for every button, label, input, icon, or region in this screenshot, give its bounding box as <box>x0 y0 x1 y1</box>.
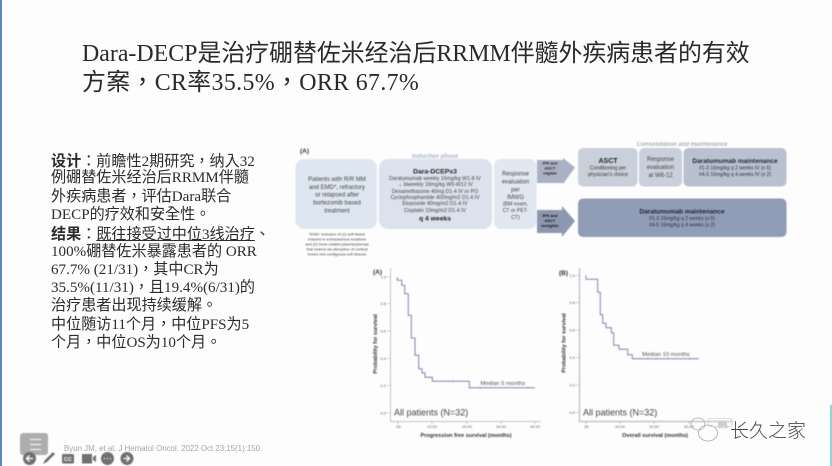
chart A: progression free survival: 20.00 <box>462 424 473 429</box>
footnote: masses in extraosseous locations <box>308 236 366 242</box>
box: ASCT: ASCT <box>598 158 618 165</box>
chart A: progression free survival: Progression free survival (months) <box>420 433 512 439</box>
chart A: progression free survival: (A) <box>373 269 382 276</box>
arrow: ASCT eligible: eligible <box>543 170 558 176</box>
box: patients: and EMD*, refractory <box>309 185 365 191</box>
chart A: progression free survival: 30.00 <box>496 424 507 429</box>
text block: design and results: 个月，中位OS为10个月。 <box>51 335 221 351</box>
footnote: and (2) bone-related plasmacytomas <box>305 242 369 246</box>
arrow: ASCT ineligible: ASCT <box>545 218 556 223</box>
text block: design and results: 例硼替佐米经治后RRMM伴髓 <box>51 170 249 186</box>
citation: Byun JM, et al. J Hematol Oncol. 2022 Oct 23;15(1):150. <box>64 444 262 453</box>
treatment schema <box>296 142 786 256</box>
icon: captions: CC <box>64 457 72 463</box>
chart B: overall survival: 10.00 <box>615 424 626 429</box>
chart A: progression free survival: .00 <box>395 424 402 429</box>
box: response evaluation W6-12: evaluation <box>647 165 674 171</box>
box: response evaluation: evaluation <box>502 180 529 186</box>
chart A: progression free survival: 0.2 <box>380 383 387 388</box>
chart A: progression free survival: 40.00 <box>530 424 541 429</box>
arrow: ASCT ineligible: IPR and <box>543 213 558 218</box>
box: response evaluation W6-12: at W6-12 <box>648 173 673 179</box>
chart B: overall survival: Median 10 months <box>642 352 690 358</box>
chart A: progression free survival: 1.0 <box>380 274 387 280</box>
watermark text: 长久之家 <box>730 416 806 443</box>
arrow: ASCT eligible: ASCT <box>545 166 556 170</box>
box: Dara-DCEP regimen: → biweekly 16mg/kg W9-W12 IV <box>397 182 473 188</box>
box: ASCT <box>578 148 638 186</box>
box: response evaluation W6-12 <box>639 148 682 186</box>
chart B: overall survival: 40.00 <box>718 424 729 429</box>
box: response evaluation <box>494 159 536 229</box>
chart B: overall survival: 0.0 <box>569 410 576 415</box>
chart A: progression free survival: 10.00 <box>427 424 438 429</box>
box: response evaluation W6-12: Response <box>647 157 675 163</box>
box: Dara-DCEP regimen <box>379 159 492 229</box>
box: daratumumab maintenance upper: #4-5 16mg/kg q 4 weeks IV (x 2) <box>699 172 771 178</box>
box: ASCT: Conditioning per <box>590 166 627 172</box>
chart B: overall survival: .00 <box>583 424 590 429</box>
chart B: overall survival: 0.2 <box>569 382 576 388</box>
chart A: progression free survival: Median 5 months <box>480 381 525 387</box>
box: daratumumab maintenance upper: Daratumumab maintenance <box>692 158 778 165</box>
box: patients <box>296 159 377 229</box>
chart A: progression free survival: Probability for survival <box>373 314 379 374</box>
box: daratumumab maintenance upper: #1-3 16mg/kg q 2 weeks IV (x 6) <box>699 166 771 172</box>
text block: design and results: 结果：既往接受过中位3线治疗、 <box>51 222 270 244</box>
text block: design and results: 67.7% (21/31)，其中CR为 <box>51 262 219 278</box>
player controls <box>20 432 134 466</box>
text block: design and results: 中位随访11个月，中位PFS为5 <box>51 317 249 333</box>
text block: design and results <box>51 149 270 351</box>
box: daratumumab maintenance lower: #1-3 16mg/kg q 2 weeks (x 6) <box>649 216 715 222</box>
box: response evaluation: per <box>511 188 520 194</box>
box: patients: Patients with R/R MM <box>308 177 366 183</box>
chart B: overall survival: All patients (N=32) <box>583 408 657 418</box>
watermark: wechat logo <box>690 418 732 442</box>
chart A: progression free survival: 0.8 <box>380 301 387 306</box>
icon: back <box>23 452 36 465</box>
chart B: overall survival: 20.00 <box>649 424 660 429</box>
chart B: overall survival: 0.4 <box>569 355 576 360</box>
box: Dara-DCEP regimen: Dexamethasone 40mg D1-4 IV or PO <box>392 189 478 195</box>
arrow: ASCT ineligible: ineligible <box>541 223 559 228</box>
chart B: overall survival: (B) <box>559 270 568 277</box>
box: daratumumab maintenance lower: #4-5 16mg/kg q 4 weeks (x 2) <box>649 222 715 228</box>
arrow: ASCT eligible: IPR and <box>543 160 558 166</box>
box: Dara-DCEP regimen: q 4 weeks <box>419 216 451 222</box>
box: response evaluation: IMWG <box>507 195 524 201</box>
chart B: overall survival: Overall survival (months) <box>622 433 688 439</box>
box: response evaluation: CT) <box>511 215 520 221</box>
box: response evaluation: CT or PET- <box>503 208 529 214</box>
chart A: progression free survival: 0.4 <box>380 356 387 361</box>
box: ASCT: physician's choice <box>588 172 628 178</box>
box: response evaluation: Response <box>502 172 530 178</box>
text block: design and results: 设计：前瞻性2期研究，纳入32 <box>51 149 255 171</box>
box: Dara-DCEP regimen: Daratumumab weekly 16mg/kg W1-8 IV <box>389 176 481 182</box>
heading: induction phase: Induction phase <box>412 154 459 160</box>
box: patients: bortezomib based <box>313 200 361 206</box>
chart B: overall survival <box>559 268 733 439</box>
box: patients: treatment <box>324 208 350 214</box>
box: patients: or relapsed after <box>315 192 359 198</box>
footnote: bones into contiguous soft tissues <box>308 252 366 256</box>
box: Dara-DCEP regimen: Cyclophosphamide 400mg/m2 D1-4 IV <box>390 195 480 201</box>
chart A: progression free survival: All patients (N=32) <box>394 408 468 418</box>
text block: design and results: 35.5%(11/31)，且19.4%(6/31)的 <box>51 280 255 296</box>
box: Dara-DCEP regimen: Etoposide 40mg/m2 D1-4 IV <box>402 201 468 207</box>
box: daratumumab maintenance lower: Daratumumab maintenance <box>639 208 725 216</box>
icon: pen <box>43 452 55 464</box>
icon: menu <box>20 433 48 455</box>
footnote: *EMD: inclusion of (1) soft tissue <box>309 232 365 236</box>
text block: design and results: 100%硼替佐米暴露患者的 ORR <box>51 244 257 260</box>
icon: forward <box>120 452 134 465</box>
chart A: progression free survival: 0.0 <box>380 410 387 416</box>
footnote: that extend via disruption of cortical <box>306 246 368 252</box>
footnote <box>305 232 369 256</box>
icon: more <box>101 452 114 465</box>
box: Dara-DCEP regimen: Dara-DCEPx3 <box>413 168 457 176</box>
text block: design and results: 治疗患者出现持续缓解。 <box>51 298 217 314</box>
heading: consolidation and maintenance: Consolidation and maintenance <box>637 142 728 148</box>
chart B: overall survival: 0.8 <box>569 300 576 305</box>
arrow: ASCT ineligible <box>537 206 575 237</box>
box: daratumumab maintenance upper <box>684 148 786 186</box>
chart A: progression free survival: 0.6 <box>380 328 387 334</box>
title <box>82 40 750 96</box>
icon: video <box>82 454 96 464</box>
chart B: overall survival: 0.6 <box>569 328 576 332</box>
box: response evaluation: (BM exam, <box>503 202 528 208</box>
box: daratumumab maintenance lower <box>578 198 786 237</box>
chart B: overall survival: Probability for survival <box>562 313 568 373</box>
title: Dara-DECP是治疗硼替佐米经治后RRMM伴髓外疾病患者的有效 <box>82 41 750 67</box>
panel label A: (A) <box>300 148 309 155</box>
box: Dara-DCEP regimen: Cisplatin 10mg/m2 D1-4 IV <box>404 208 467 214</box>
title: 方案，CR率35.5%，ORR 67.7% <box>82 70 419 96</box>
arrow: ASCT eligible <box>537 158 575 184</box>
chart A: progression free survival <box>373 268 541 439</box>
chart B: overall survival: 1.0 <box>569 273 576 278</box>
text block: design and results: 外疾病患者，评估Dara联合 <box>51 189 231 205</box>
text block: design and results: DECP的疗效和安全性。 <box>51 207 210 223</box>
chart B: overall survival: 30.00 <box>684 424 695 429</box>
